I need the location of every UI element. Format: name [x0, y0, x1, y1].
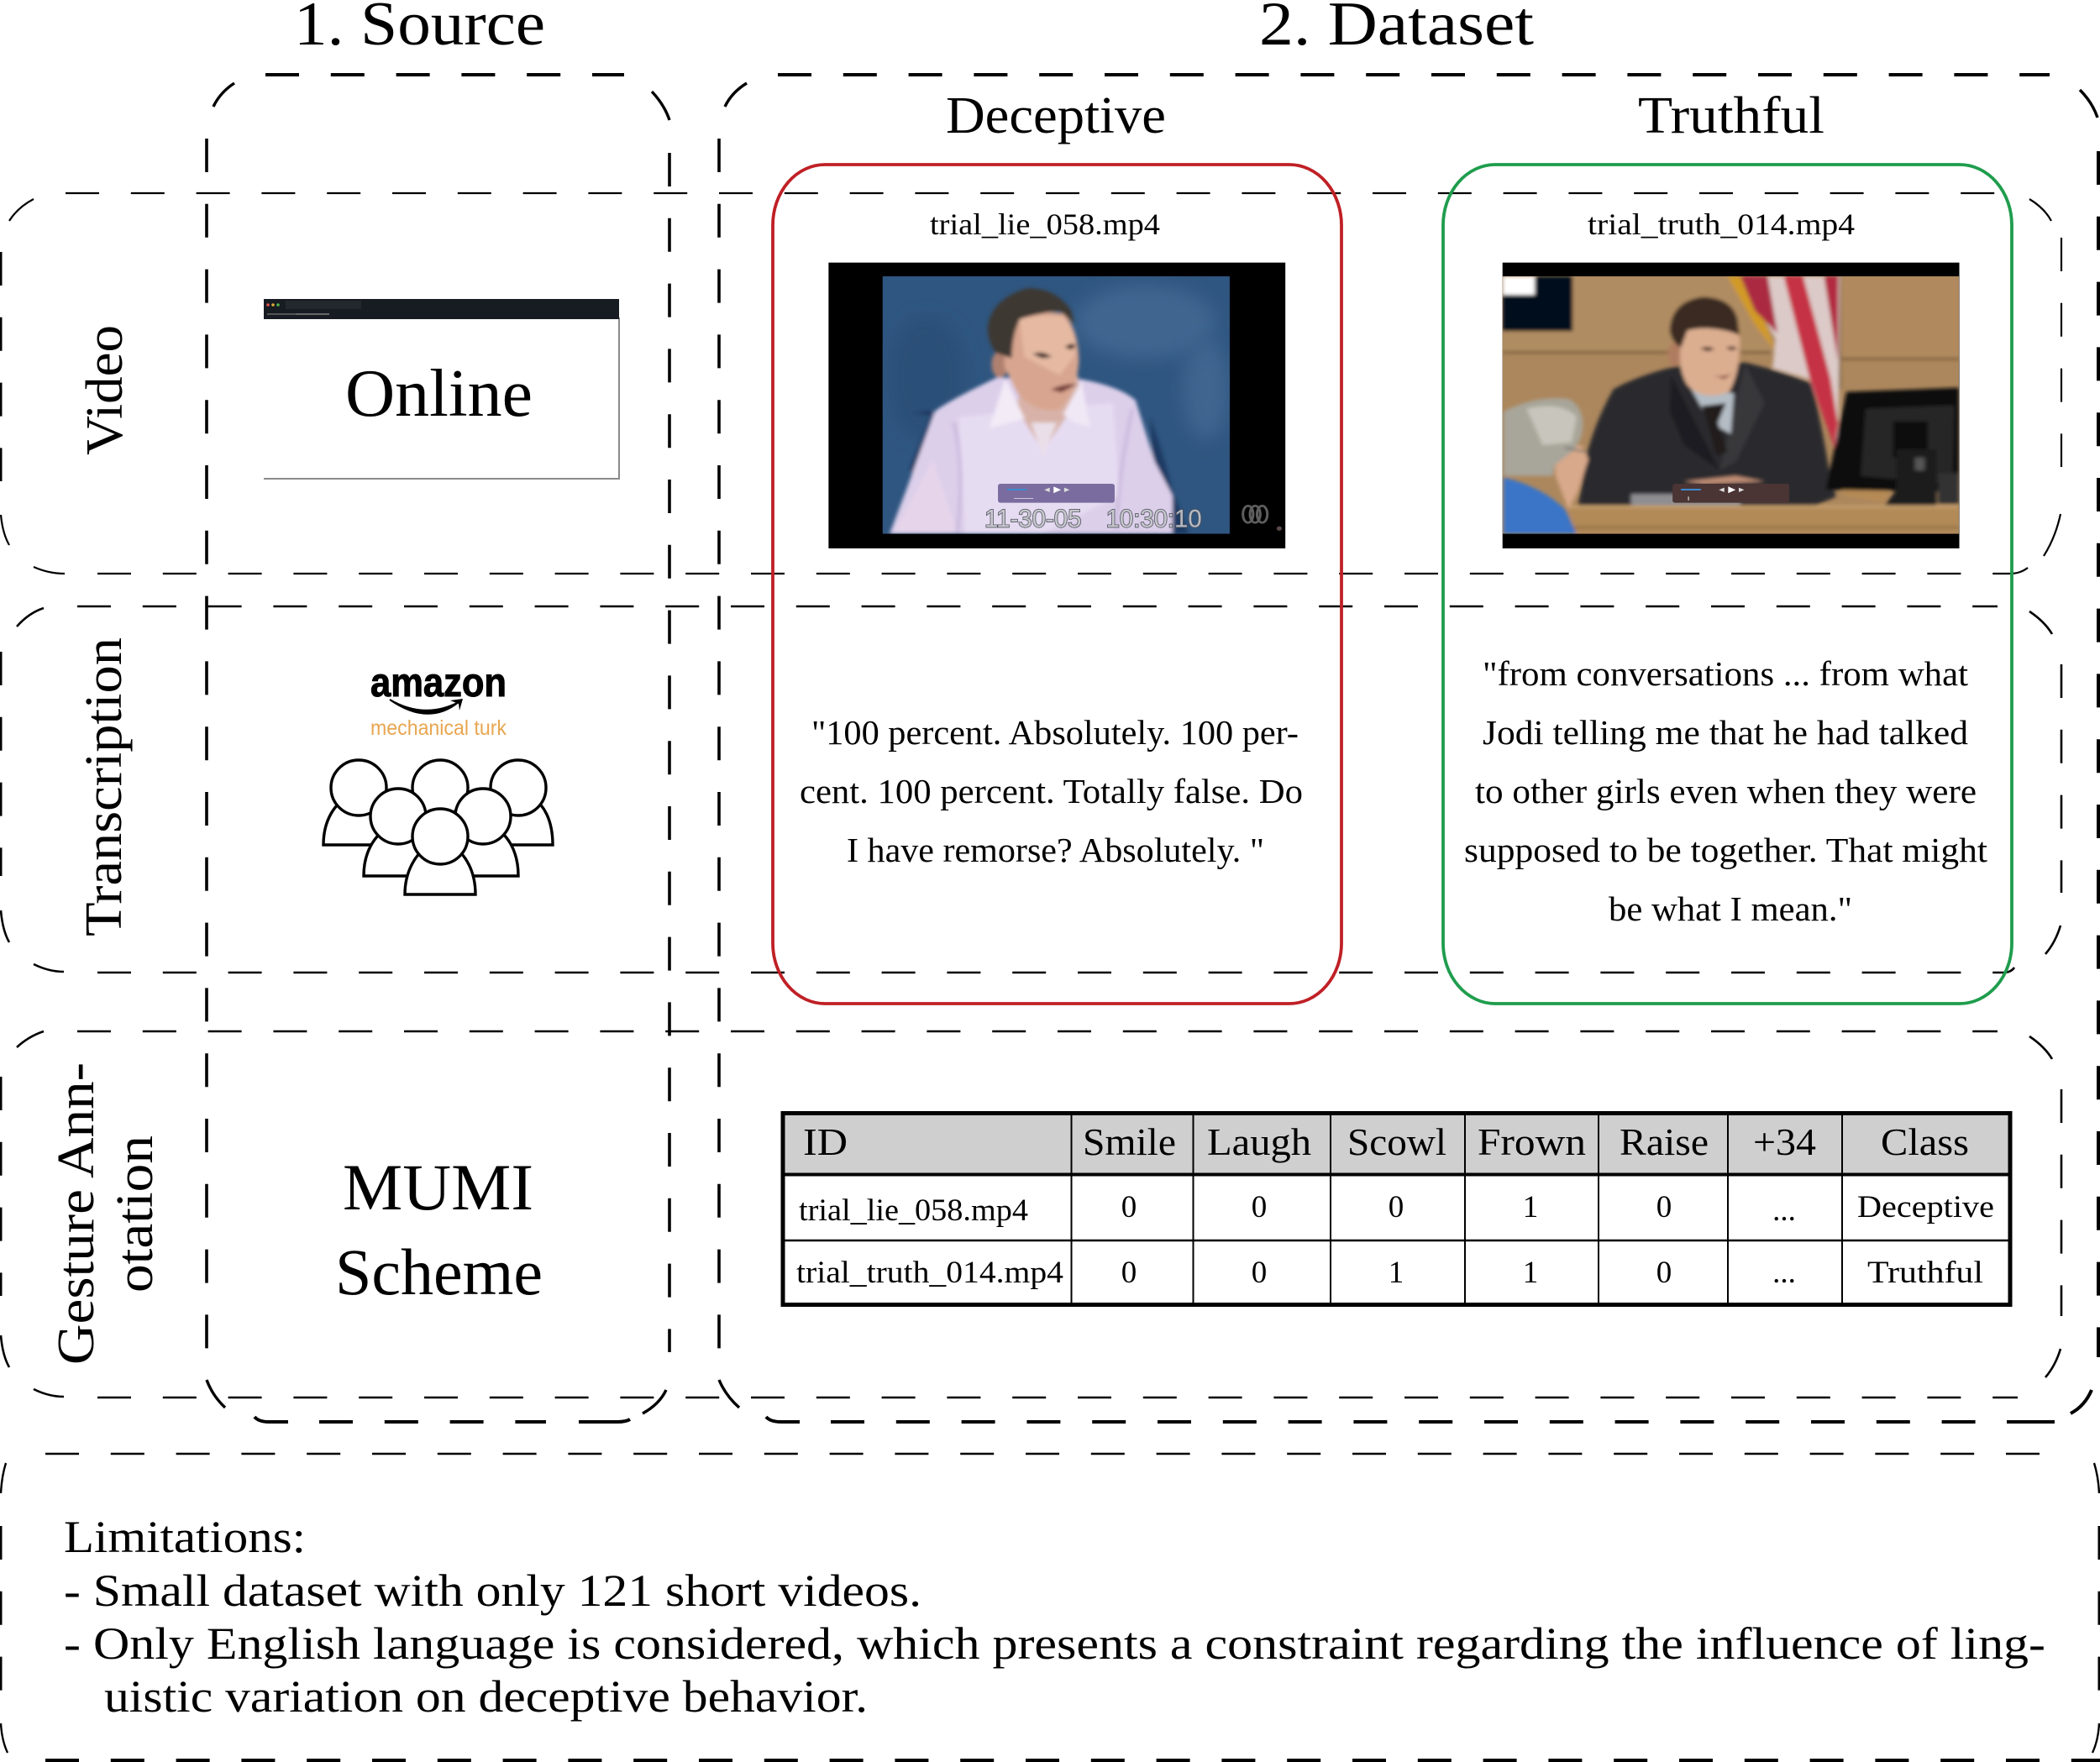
row label: Transcription: Transcription — [76, 637, 133, 936]
panel: limitations — [1, 1454, 2100, 1760]
row panel: transcription — [1, 606, 2061, 973]
text: limitations: uistic variation on deceptive behavior. — [104, 1671, 868, 1722]
timestamp: 11-30-05 — [984, 504, 1082, 532]
video player controls — [998, 484, 1115, 503]
table row: trial_lie_058: 0 — [1656, 1190, 1672, 1224]
quote: deceptive: cent. 100 percent. Totally false. Do — [800, 772, 1303, 810]
table row: trial_lie_058 — [799, 1190, 1994, 1228]
video frame: deceptive witness — [828, 263, 1285, 548]
quote: truthful: supposed to be together. That might — [1464, 831, 1988, 869]
table row: trial_truth_014: Truthful — [1867, 1256, 1983, 1290]
table header: Class — [1881, 1120, 1969, 1163]
table header — [803, 1120, 1969, 1163]
video frame: truthful witness — [1503, 263, 1960, 548]
text: limitations: - Small dataset with only 121 short videos. — [64, 1565, 921, 1616]
table row: trial_lie_058: 0 — [1252, 1190, 1267, 1224]
quote: truthful: to other girls even when they were — [1475, 772, 1977, 810]
table header: Smile — [1083, 1120, 1176, 1163]
table row: trial_lie_058: 0 — [1389, 1190, 1404, 1224]
row panel: gesture annotation — [1, 1031, 2061, 1398]
table: gesture annotations — [781, 1111, 2012, 1306]
heading: Deceptive: Deceptive — [946, 87, 1166, 144]
quote: deceptive — [800, 713, 1303, 869]
table row: trial_truth_014: 1 — [1389, 1256, 1404, 1290]
video player controls — [1672, 484, 1789, 503]
text: MUMI Scheme: MUMI — [343, 1151, 533, 1224]
logo: amazon mechanical turk — [370, 661, 507, 740]
logo: amazon mechanical turk: mechanical turk — [370, 716, 507, 740]
browser window: Online — [264, 299, 619, 479]
table row: trial_truth_014: trial_truth_014.mp4 — [796, 1256, 1063, 1290]
card: truthful — [1443, 165, 2012, 1004]
filename: truthful video: trial_truth_014.mp4 — [1588, 207, 1855, 241]
column panel: dataset — [719, 75, 2098, 1422]
row label: Gesture Annotation: Gesture Ann- — [48, 1062, 105, 1365]
text: MUMI Scheme: Scheme — [335, 1235, 543, 1308]
table header: Scowl — [1347, 1120, 1446, 1163]
table row: trial_truth_014: ... — [1772, 1256, 1796, 1290]
quote: deceptive: "100 percent. Absolutely. 100 per- — [811, 713, 1299, 752]
icon: crowd of workers — [323, 760, 553, 894]
timestamp — [984, 504, 1202, 532]
table row: trial_lie_058: ... — [1772, 1193, 1796, 1228]
table row: trial_lie_058: 1 — [1523, 1190, 1538, 1224]
text: limitations: - Only English language is considered, which presents a constraint regarding the influence of ling- — [64, 1618, 2045, 1669]
row label: Video: Video — [76, 325, 134, 455]
table header: Raise — [1620, 1120, 1709, 1163]
row panel: video — [1, 193, 2061, 574]
row label: Gesture Annotation: otation — [107, 1135, 164, 1293]
table header: Frown — [1478, 1120, 1586, 1163]
table row: trial_truth_014: 1 — [1523, 1256, 1538, 1290]
logo: amazon mechanical turk: amazon — [370, 661, 507, 705]
text: MUMI Scheme — [335, 1151, 543, 1308]
table row: trial_lie_058: Deceptive — [1857, 1190, 1994, 1224]
quote: truthful: Jodi telling me that he had talked — [1483, 713, 1968, 752]
table row: trial_truth_014 — [796, 1256, 1983, 1290]
table row: trial_truth_014: 0 — [1656, 1256, 1672, 1290]
quote: truthful — [1464, 654, 1988, 928]
quote: truthful: be what I mean." — [1609, 889, 1852, 928]
table row: trial_truth_014: 0 — [1252, 1256, 1267, 1290]
timestamp: 10:30:10 — [1106, 504, 1202, 532]
table header: +34 — [1753, 1120, 1816, 1163]
text: limitations — [64, 1512, 2045, 1722]
column panel: source — [207, 75, 669, 1422]
browser window: Online: Online — [345, 357, 533, 431]
text: limitations: Limitations: — [64, 1512, 306, 1562]
table header: Laugh — [1207, 1120, 1311, 1163]
row label: Gesture Annotation — [48, 1062, 164, 1365]
quote: truthful: "from conversations ... from what — [1483, 654, 1969, 693]
quote: deceptive: I have remorse? Absolutely. " — [847, 831, 1264, 869]
table row: trial_truth_014: 0 — [1121, 1256, 1137, 1290]
heading: Truthful: Truthful — [1638, 87, 1824, 144]
table header: ID — [803, 1120, 848, 1163]
table row: trial_lie_058: trial_lie_058.mp4 — [799, 1193, 1028, 1228]
card: deceptive — [773, 165, 1341, 1004]
table row: trial_lie_058: 0 — [1121, 1190, 1137, 1224]
filename: deceptive video: trial_lie_058.mp4 — [930, 207, 1160, 241]
